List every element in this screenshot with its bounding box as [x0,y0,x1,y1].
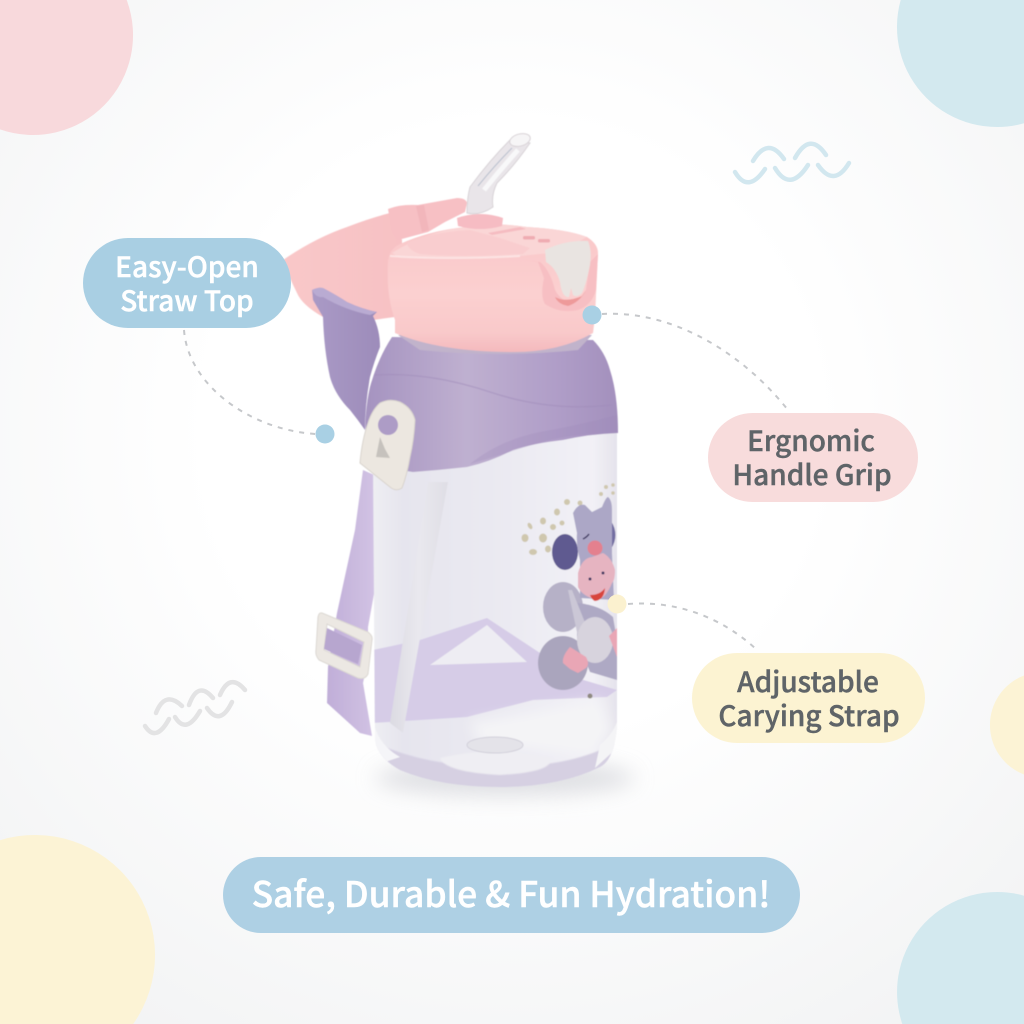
icon: bottom left waves [145,682,245,733]
tagline banner [223,857,800,933]
connector: strap dashed line [628,603,757,650]
product: water bottle [283,131,618,795]
straw collar [457,214,503,229]
callout: ergonomic handle grip: Ergnomic [747,420,875,460]
dots [522,483,615,555]
straw [467,140,530,214]
strap [327,470,392,736]
pointer dot: strap [608,594,626,614]
callout: adjustable carrying strap: Carying Strap [718,695,900,735]
lid latch tooth [545,241,591,297]
tagline banner: Safe, Durable & Fun Hydration! [252,867,770,918]
callout: easy-open straw top: Straw Top [120,280,254,320]
inner strap reflection [373,618,617,723]
bear head [573,497,614,600]
decorative circle: bottom left yellow [0,835,155,1024]
strap buckle [316,613,372,678]
lid latch button [525,254,598,311]
base tint [388,748,611,788]
bear torso [577,603,617,680]
lid vents [488,227,526,235]
inner straw [390,482,448,733]
bottle shadow [375,760,635,796]
callout: adjustable carrying strap [692,653,925,743]
hinge [388,198,467,240]
flip cap arm [283,213,402,321]
pointer dot: straw top [582,306,602,324]
strap clip [360,400,415,490]
lid top plate [392,224,587,259]
callout: ergonomic handle grip: Handle Grip [732,454,892,494]
handle [312,288,380,430]
decorative circle: top right blue [897,0,1024,127]
bear ears [552,534,578,570]
main lid [388,224,598,352]
neck ring [398,335,592,354]
bear print [522,483,617,698]
icon: top right waves [735,144,849,182]
decorative circle: right yellow [990,676,1024,774]
decorative circle: bottom right blue [897,892,1024,1024]
callout: easy-open straw top [83,238,291,328]
decorative circle: top left pink [0,0,133,135]
callout: easy-open straw top: Easy-Open [115,246,259,286]
pointer dot: handle grip [316,424,334,444]
purple shoulder [365,337,618,472]
clear bottle body [373,430,617,787]
callout: adjustable carrying strap: Adjustable [737,661,879,701]
connector: straw top dashed line [184,330,316,434]
callout: ergonomic handle grip [708,413,918,502]
connector: handle grip dashed line [602,314,788,410]
glass highlight [480,722,524,740]
